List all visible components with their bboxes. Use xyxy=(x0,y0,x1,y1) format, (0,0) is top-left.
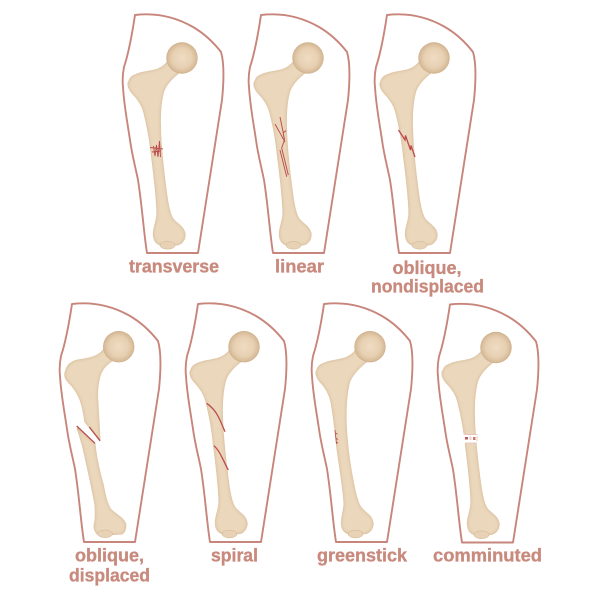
label: linear: linear xyxy=(275,256,324,276)
spiral crack xyxy=(207,403,228,470)
femur bone xyxy=(128,42,198,249)
limb outline xyxy=(249,14,349,253)
label: oblique, nondisplaced: nondisplaced xyxy=(371,276,484,296)
panel: spiral fracture xyxy=(186,303,286,566)
panel: oblique displaced fracture xyxy=(60,303,160,586)
limb outline xyxy=(438,304,538,542)
limb outline xyxy=(312,303,412,542)
limb outline xyxy=(123,14,223,253)
curved femur bone xyxy=(316,331,386,538)
label: spiral: spiral xyxy=(211,546,258,566)
label: oblique, displaced xyxy=(69,546,150,586)
panel: oblique nondisplaced fracture xyxy=(371,14,484,296)
panel: transverse fracture xyxy=(123,14,223,276)
panel: greenstick fracture xyxy=(312,303,412,566)
label: transverse: transverse xyxy=(129,256,219,276)
femur bone xyxy=(380,42,450,249)
comminuted gap with fragments xyxy=(460,434,482,444)
label: greenstick: greenstick xyxy=(317,546,408,566)
label: comminuted: comminuted xyxy=(433,546,542,566)
linear crack xyxy=(275,117,288,177)
broken femur bone xyxy=(65,331,134,538)
greenstick crack xyxy=(335,430,338,444)
panel: comminuted fracture xyxy=(433,304,542,566)
label: oblique, nondisplaced: oblique, xyxy=(392,258,462,278)
limb outline xyxy=(60,303,160,542)
limb outline xyxy=(186,303,286,542)
limb outline xyxy=(375,14,475,253)
oblique crack xyxy=(398,130,415,157)
transverse crack xyxy=(150,141,163,157)
fracture edges xyxy=(77,426,100,443)
label: oblique, displaced: displaced xyxy=(69,566,150,586)
femur bone xyxy=(190,331,260,538)
panel: linear fracture xyxy=(249,14,349,276)
femur bone xyxy=(254,42,324,249)
label: oblique, displaced: oblique, xyxy=(75,546,144,566)
label: oblique, nondisplaced xyxy=(371,258,484,296)
femur bone xyxy=(442,332,512,539)
